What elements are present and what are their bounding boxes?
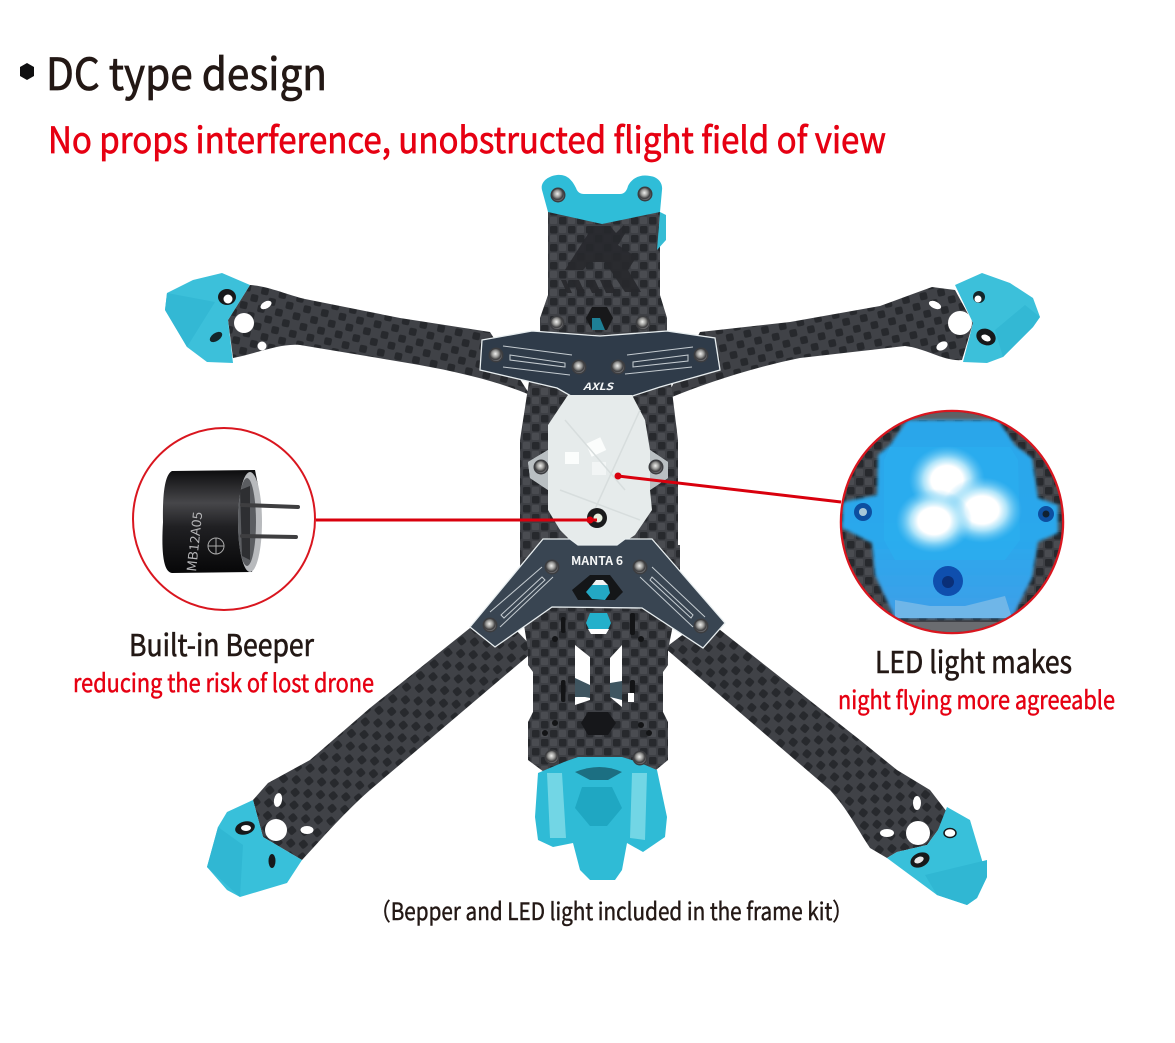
- drone frame: [165, 175, 1040, 905]
- LED callout circle: [840, 410, 1064, 634]
- beeper callout circle: [133, 428, 315, 610]
- LED housing detail: [528, 410, 668, 528]
- beeper photo: MB12A05: [181, 511, 206, 572]
- beeper pointer line: [316, 516, 597, 524]
- lower plate cyan hexagon: [586, 613, 611, 634]
- beeper caption: Built-in Beeper: [129, 621, 314, 665]
- V plate window: [572, 575, 623, 600]
- upper plate slots: [503, 346, 693, 375]
- beeper caption: [73, 621, 374, 700]
- LED caption: LED light makes: [875, 638, 1072, 682]
- nose plate: [540, 212, 667, 345]
- arm holes: [234, 299, 972, 845]
- small holes: [542, 636, 652, 736]
- lower left arm: [253, 608, 535, 860]
- nose hexagon hole: [586, 307, 613, 330]
- lower plate slots: [561, 613, 635, 702]
- battery strap: [575, 678, 622, 700]
- upper cross plate: [480, 331, 720, 400]
- LED caption: [838, 638, 1115, 717]
- LED caption: night flying more agreeable: [838, 681, 1115, 717]
- LED pointer line: [614, 472, 841, 502]
- lower plate hexagon: [581, 712, 616, 735]
- LED photo: [840, 410, 1064, 634]
- subtitle: No props interference, unobstructed flight field of view: [48, 112, 886, 164]
- AXIS plate logo: AXLS: [582, 378, 615, 393]
- icon: hexagon bullet: [20, 63, 34, 80]
- lower plate windows: [575, 645, 634, 707]
- motor guard: upper right: [955, 273, 1040, 363]
- title: DC type design: [46, 39, 327, 103]
- lower V plate: [470, 539, 725, 648]
- beeper photo: [162, 470, 298, 573]
- lower centre plate: [520, 545, 680, 775]
- footnote: （Bepper and LED light included in the frame kit）: [370, 892, 853, 927]
- central body plate: [520, 375, 678, 575]
- upper left arm: [228, 285, 530, 395]
- camera mount: [535, 757, 667, 880]
- motor guard: lower left: [207, 800, 302, 897]
- cyan side strip: [657, 212, 666, 250]
- V plate slots: [490, 567, 705, 627]
- frame screws: [482, 186, 708, 766]
- nose cyan bumper: [542, 175, 662, 224]
- upper right arm: [665, 287, 973, 400]
- V plate cyan hexagon: [586, 585, 610, 600]
- lower right arm: [665, 618, 947, 858]
- logo emboss: [561, 225, 641, 293]
- motor guard: upper left: [165, 273, 250, 363]
- MANTA 6 label: MANTA 6: [571, 552, 623, 569]
- motor guard: lower right: [887, 807, 987, 905]
- LED housing: [528, 395, 668, 545]
- beeper caption: reducing the risk of lost drone: [73, 664, 374, 700]
